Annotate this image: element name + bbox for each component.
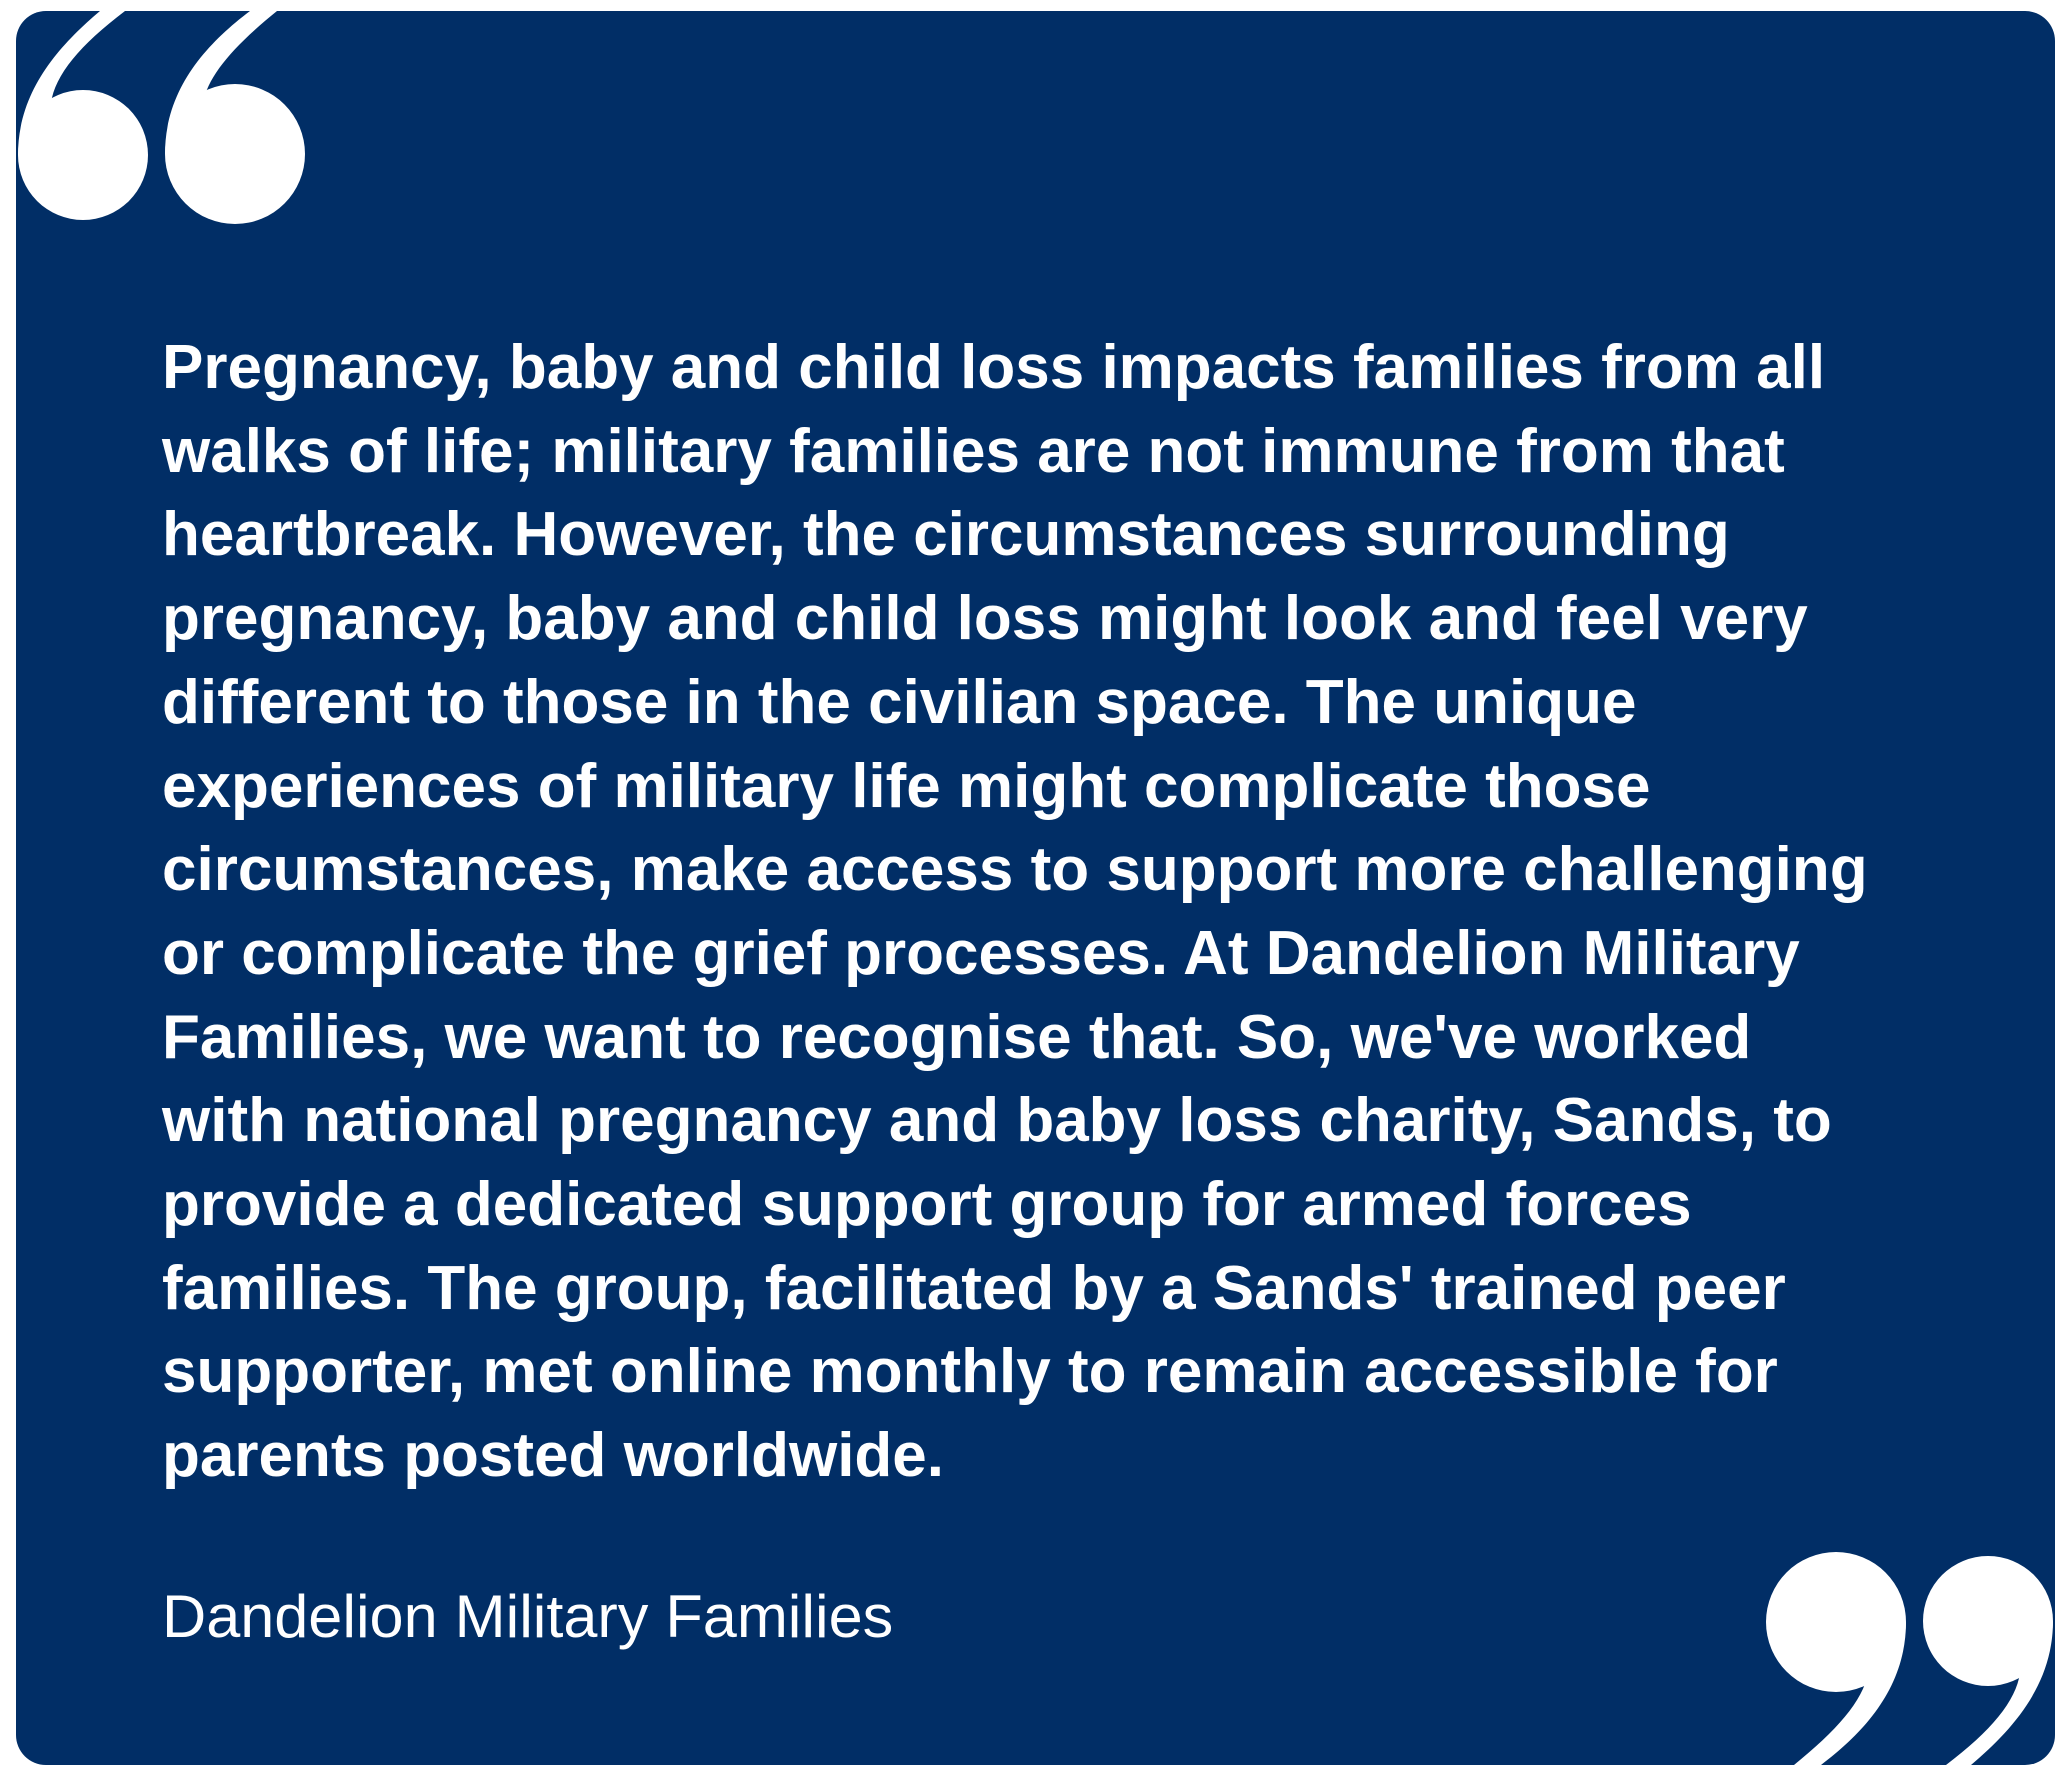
text block: quote: different to those in the civilian space. The unique [162, 668, 1636, 737]
text block: quote: Pregnancy, baby and child loss impacts families from all [162, 333, 1825, 402]
text block: attribution: Dandelion Military Families [162, 1583, 893, 1650]
icon: opening quotation mark [18, 11, 305, 224]
text block: quote: pregnancy, baby and child loss might look and feel very [162, 584, 1808, 653]
text block: quote: circumstances, make access to support more challenging [162, 835, 1868, 904]
text block: quote: with national pregnancy and baby loss charity, Sands, to [162, 1086, 1832, 1155]
text block: quote: heartbreak. However, the circumstances surrounding [162, 500, 1730, 569]
text block: quote: walks of life; military families are not immune from that [162, 417, 1785, 486]
text block: quote: Families, we want to recognise that. So, we've worked [162, 1003, 1751, 1072]
text block: quote: experiences of military life might complicate those [162, 752, 1650, 821]
text block: quote: or complicate the grief processes. At Dandelion Military [162, 919, 1800, 988]
text block: quote: families. The group, facilitated by a Sands' trained peer [162, 1254, 1786, 1323]
text block: quote: parents posted worldwide. [162, 1421, 944, 1490]
text block: quote: supporter, met online monthly to remain accessible for [162, 1337, 1778, 1406]
text block: quote: provide a dedicated support group for armed forces [162, 1170, 1692, 1239]
text block: quote [162, 333, 1868, 1490]
icon: closing quotation mark [1766, 1552, 2053, 1765]
